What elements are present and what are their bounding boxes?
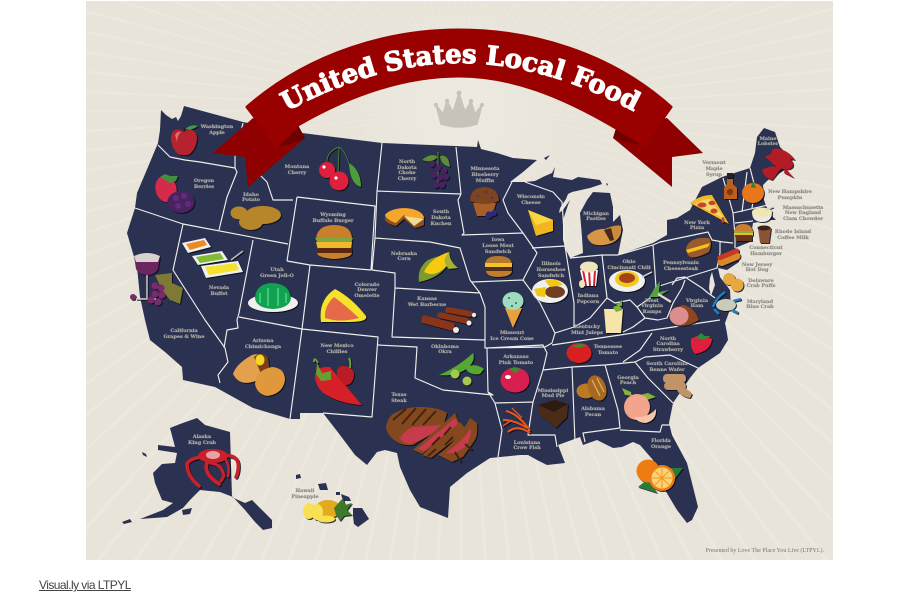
label: Nebraska: Corn — [397, 256, 411, 262]
icon: Vermont maple syrup — [724, 173, 737, 199]
label: Colorado: Omelette — [354, 293, 380, 299]
label: Illinois: Horseshoe — [536, 267, 566, 273]
icon: New York pizza — [690, 195, 729, 224]
label: Virginia: Virginia — [685, 298, 709, 304]
label: New York: New York — [684, 220, 711, 226]
icon: Florida orange — [636, 460, 683, 493]
icon: Texas steak — [386, 407, 477, 462]
label: Tennessee: Tomato — [598, 350, 619, 356]
icon: Nebraska corn — [419, 252, 458, 282]
label: Kansas: Wet Barbecue — [407, 302, 446, 308]
icon: Connecticut hamburger — [734, 224, 753, 241]
label: Wyoming: Wyoming — [319, 212, 346, 218]
label: Florida: Florida — [651, 438, 672, 444]
label: Pennsylvania: Cheesesteak — [664, 266, 699, 272]
label: South Carolina: Benne Wafer — [649, 367, 685, 373]
icon: Arkansas pink tomato — [500, 367, 530, 392]
source caption: Visual.ly via LTPYL — [39, 578, 131, 592]
label: Arizona: Arizona — [252, 338, 274, 344]
map: Chesapeake Bay — [709, 272, 715, 296]
label: North Dakota: North — [399, 159, 416, 165]
label: New Hampshire: Pumpkin — [778, 195, 803, 201]
icon: Illinois horseshoe sandwich — [532, 279, 568, 303]
icon: Indiana popcorn — [579, 262, 598, 288]
label: Louisiana: Crow Fish — [513, 445, 541, 451]
label: Illinois: Sandwich — [538, 273, 565, 279]
label: Oregon: Oregon — [194, 178, 215, 184]
icon: Colorado Denver omelette — [321, 289, 366, 322]
label: Kentucky: Kentucky — [574, 324, 600, 330]
label: West Virginia: Ramps — [643, 309, 662, 315]
icon: Oklahoma okra — [439, 353, 484, 386]
label: Louisiana: Louisiana — [514, 440, 541, 446]
label: Maryland: Blue Crab — [746, 304, 774, 310]
icon: Delaware crab puffs — [723, 273, 744, 292]
label: North Dakota: Cherry — [398, 176, 416, 182]
icon: Georgia peach — [622, 388, 656, 423]
label: Texas: Texas — [391, 392, 407, 398]
label: Indiana: Indiana — [577, 293, 599, 299]
label: Rhode Island: Rhode Island — [775, 229, 812, 235]
label: New York: Pizza — [690, 225, 705, 231]
icon: Nevada buffet — [182, 238, 243, 278]
icon: Michigan pasties — [587, 226, 621, 245]
icon: Maryland blue crab — [713, 292, 741, 314]
title: United States Local Food — [278, 44, 642, 112]
icon: Missouri ice cream cone — [502, 292, 524, 328]
label: Vermont: Maple — [706, 166, 722, 172]
label: Tennessee: Tennessee — [594, 344, 622, 350]
label: New Jersey: New Jersey — [742, 262, 772, 268]
label: Virginia: Ham — [691, 303, 704, 309]
label: Iowa: Loose Meat — [482, 243, 514, 249]
icon: Virginia ham — [670, 305, 699, 326]
label: South Carolina: South Carolina — [646, 361, 688, 367]
icon: Rhode Island coffee milk — [758, 226, 771, 243]
icon: Washington apple — [171, 125, 198, 155]
icon: Iowa loose meat sandwich — [485, 256, 512, 277]
label: Idaho: Potato — [242, 197, 261, 203]
label: Georgia: Peach — [620, 380, 637, 386]
icon: Oregon berries — [152, 173, 194, 213]
crown knobs — [434, 91, 484, 107]
label: New Mexico: New Mexico — [320, 343, 354, 349]
icon: South Dakota kuchen — [385, 208, 424, 228]
label: Minnesota: Blueberry — [471, 172, 499, 178]
map: contiguous United States — [127, 106, 793, 523]
label: North Dakota: Dakota — [397, 165, 418, 171]
label: California: California — [170, 328, 198, 334]
icon: Massachusetts clam chowder — [752, 207, 773, 222]
label: Kentucky: Mint Juleps — [571, 330, 603, 336]
label: Delaware: Delaware — [748, 278, 774, 284]
icon: New Jersey hot dog — [716, 248, 742, 267]
label: West Virginia: West — [644, 298, 659, 304]
label: South Dakota: South — [433, 209, 450, 215]
label: Mississippi: Mississippi — [538, 388, 568, 394]
label: Iowa: Iowa — [492, 237, 505, 243]
icon: California grapes and wine — [130, 253, 183, 306]
label: Ohio: Cincinnati Chili — [607, 265, 651, 271]
map: state borders — [135, 123, 768, 457]
label: Minnesota: Minnesota — [471, 166, 500, 172]
label: Arizona: Chimichanga — [245, 344, 282, 350]
label: New Jersey: Hot Dog — [746, 267, 769, 273]
label: Nebraska: Nebraska — [391, 251, 418, 257]
label: California: Grapes & Wine — [164, 334, 204, 340]
label: Oklahoma: Oklahoma — [431, 344, 460, 350]
label: North Carolina: Carolina — [656, 341, 680, 347]
label: West Virginia: Virginia — [640, 303, 664, 309]
map: Hawaii — [296, 474, 369, 527]
label: Mississippi: Mud Pie — [542, 393, 564, 399]
label: Hawaii: Pineapple — [291, 494, 319, 500]
label: Oregon: Berries — [194, 184, 214, 190]
label: Arkansas: Pink Tomato — [499, 360, 534, 366]
icon: Kentucky mint julep — [604, 300, 623, 333]
label: North Dakota: Choke — [398, 170, 416, 176]
icon: Ohio Cincinnati chili — [609, 270, 652, 292]
label: Kansas: Kansas — [417, 296, 437, 302]
label: Alabama: Pecan — [585, 412, 602, 418]
label: Michigan: Michigan — [583, 211, 609, 217]
icon: crown — [436, 93, 482, 127]
icon: New Hampshire pumpkin — [742, 183, 764, 203]
icon: Hawaii pineapple — [303, 498, 352, 522]
icon: South Carolina benne wafer — [663, 374, 692, 398]
label: Vermont: Syrup — [706, 172, 723, 178]
icon: Wisconsin cheese — [528, 210, 553, 236]
label: Delaware: Crab Puffs — [747, 283, 776, 289]
icon: Kansas wet barbecue ribs — [421, 307, 476, 333]
ribbon left tail — [213, 118, 305, 187]
icon: New Mexico chillies — [314, 358, 362, 405]
icon: Wyoming buffalo burger — [315, 225, 353, 259]
label: Rhode Island: Coffee Milk — [777, 235, 809, 241]
label: Indiana: Popcorn — [577, 299, 600, 305]
label: Michigan: Pasties — [586, 216, 606, 222]
credit line: Presented by Love The Place You Live (LTPYL). — [706, 547, 824, 554]
label: Idaho: Idaho — [243, 192, 260, 198]
label: Maryland: Maryland — [747, 299, 774, 305]
label: Minnesota: Muffin — [476, 178, 495, 184]
icon: North Dakota choke cherry — [422, 152, 450, 188]
panel: sunburst background — [86, 1, 833, 560]
label: Missouri: Ice Cream Cone — [490, 336, 534, 342]
icon: West Virginia ramps — [649, 281, 671, 302]
label: Alabama: Alabama — [580, 406, 606, 412]
icon: Minnesota blueberry muffin — [470, 187, 499, 219]
icon: Tennessee tomato — [566, 343, 592, 363]
label: Missouri: Missouri — [500, 330, 524, 336]
icon: Pennsylvania cheesesteak — [686, 238, 711, 257]
icon: Alabama pecan — [576, 373, 610, 403]
label: North Carolina: North — [660, 336, 677, 342]
label: Connecticut: Connecticut — [749, 245, 783, 251]
label: Montana: Cherry — [288, 170, 306, 176]
label: Alaska: King Crab — [188, 440, 216, 446]
label: Wisconsin: Cheese — [521, 200, 541, 206]
label: Connecticut: Hamburger — [750, 251, 782, 257]
label: Ohio: Ohio — [623, 259, 636, 265]
label: Arkansas: Arkansas — [502, 354, 529, 360]
label: Maine: Maine — [759, 136, 777, 142]
icon: North Carolina strawberry — [691, 333, 712, 354]
label: Alaska: Alaska — [192, 434, 212, 440]
label: Wyoming: Buffalo Burger — [312, 218, 354, 224]
icon: Alaska king crab — [187, 449, 238, 486]
label: New Mexico: Chillies — [327, 349, 348, 355]
icon: Arizona chimichanga — [233, 354, 285, 396]
label: Pennsylvania: Pennsylvania — [663, 260, 700, 266]
label: Iowa: Sandwich — [485, 249, 512, 255]
label: New Hampshire: New Hampshire — [768, 189, 812, 195]
label: North Carolina: Strawberry — [653, 347, 683, 353]
label: Illinois: Illinois — [541, 261, 561, 267]
label: Massachusetts: Clam Chowder — [783, 216, 823, 222]
icon: Louisiana crawfish — [503, 408, 530, 433]
label: Washington: Apple — [208, 130, 225, 136]
label: Florida: Orange — [651, 444, 671, 450]
map: Alaska — [122, 418, 272, 530]
icon: Montana cherry — [319, 147, 361, 190]
label: Montana: Montana — [285, 164, 310, 170]
label: Georgia: Georgia — [617, 375, 640, 381]
label: Utah: Utah — [270, 267, 284, 273]
icon: Maine lobster — [762, 148, 796, 180]
label: Hawaii: Hawaii — [296, 488, 315, 494]
label: Oklahoma: Okra — [438, 349, 453, 355]
label: Washington: Washington — [200, 124, 234, 130]
label: Colorado: Denver — [357, 287, 377, 293]
icon: Mississippi mud pie — [538, 400, 568, 428]
label: Texas: Steak — [391, 398, 407, 404]
label: Vermont: Vermont — [701, 160, 726, 166]
map: Isle Royale — [544, 155, 608, 186]
label: Massachusetts: New England — [785, 210, 822, 216]
label: Colorado: Colorado — [355, 282, 380, 288]
label: Nevada: Nevada — [209, 285, 230, 291]
label: Massachusetts: Massachusetts — [783, 205, 823, 211]
icon: Utah green Jell-O — [248, 283, 298, 312]
label: South Dakota: Kuchen — [431, 221, 452, 227]
label: South Dakota: Dakota — [431, 215, 452, 221]
ribbon folds — [277, 125, 643, 147]
label: Utah: Green Jell-O — [260, 273, 295, 279]
label: Nevada: Buffet — [210, 291, 228, 297]
icon: Idaho potato — [230, 206, 281, 230]
ribbon main band — [247, 30, 671, 146]
label: Maine: Lobster — [758, 141, 779, 147]
ribbon right tail — [613, 118, 703, 187]
label: Wisconsin: Wisconsin — [516, 194, 545, 200]
